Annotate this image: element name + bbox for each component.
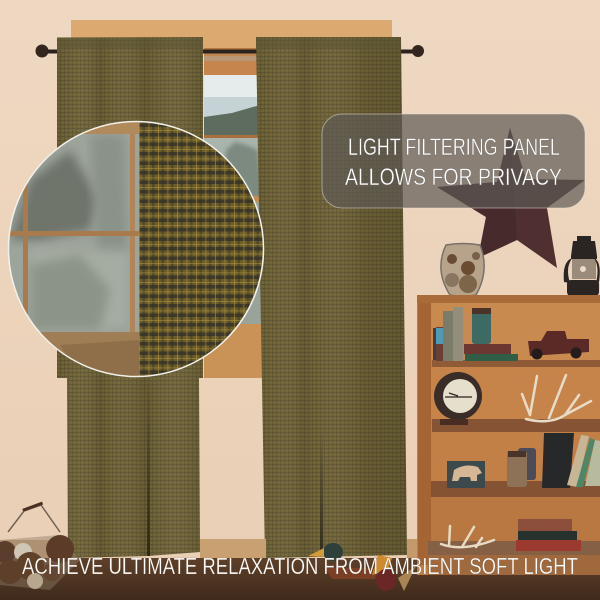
translucent callout panel <box>322 114 585 208</box>
magnified plaid fabric <box>139 120 265 380</box>
curtain rod <box>36 44 424 58</box>
bookshelf <box>417 295 600 575</box>
lantern <box>564 236 600 296</box>
wire basket with balls <box>0 502 80 590</box>
clock <box>434 372 482 425</box>
window sill <box>204 324 267 378</box>
marble jar <box>472 308 491 344</box>
books middle shelf <box>542 433 600 488</box>
glass jars <box>507 448 536 487</box>
bear sign <box>447 461 485 488</box>
barn star <box>437 128 585 268</box>
books top shelf <box>433 307 518 361</box>
left curtain <box>57 37 203 558</box>
wood floor <box>0 558 600 600</box>
book stack <box>516 519 581 551</box>
baseboard <box>0 539 421 560</box>
wire jar with pinecones <box>441 244 484 296</box>
window <box>204 50 266 326</box>
right curtain <box>256 37 407 558</box>
antler on bottom shelf <box>441 526 494 547</box>
toy truck <box>528 331 589 360</box>
magnified detail circle <box>8 120 265 382</box>
wood header board <box>71 20 392 51</box>
antler <box>522 375 591 421</box>
carved duck decoy <box>308 543 416 591</box>
magnified window view <box>8 120 140 382</box>
